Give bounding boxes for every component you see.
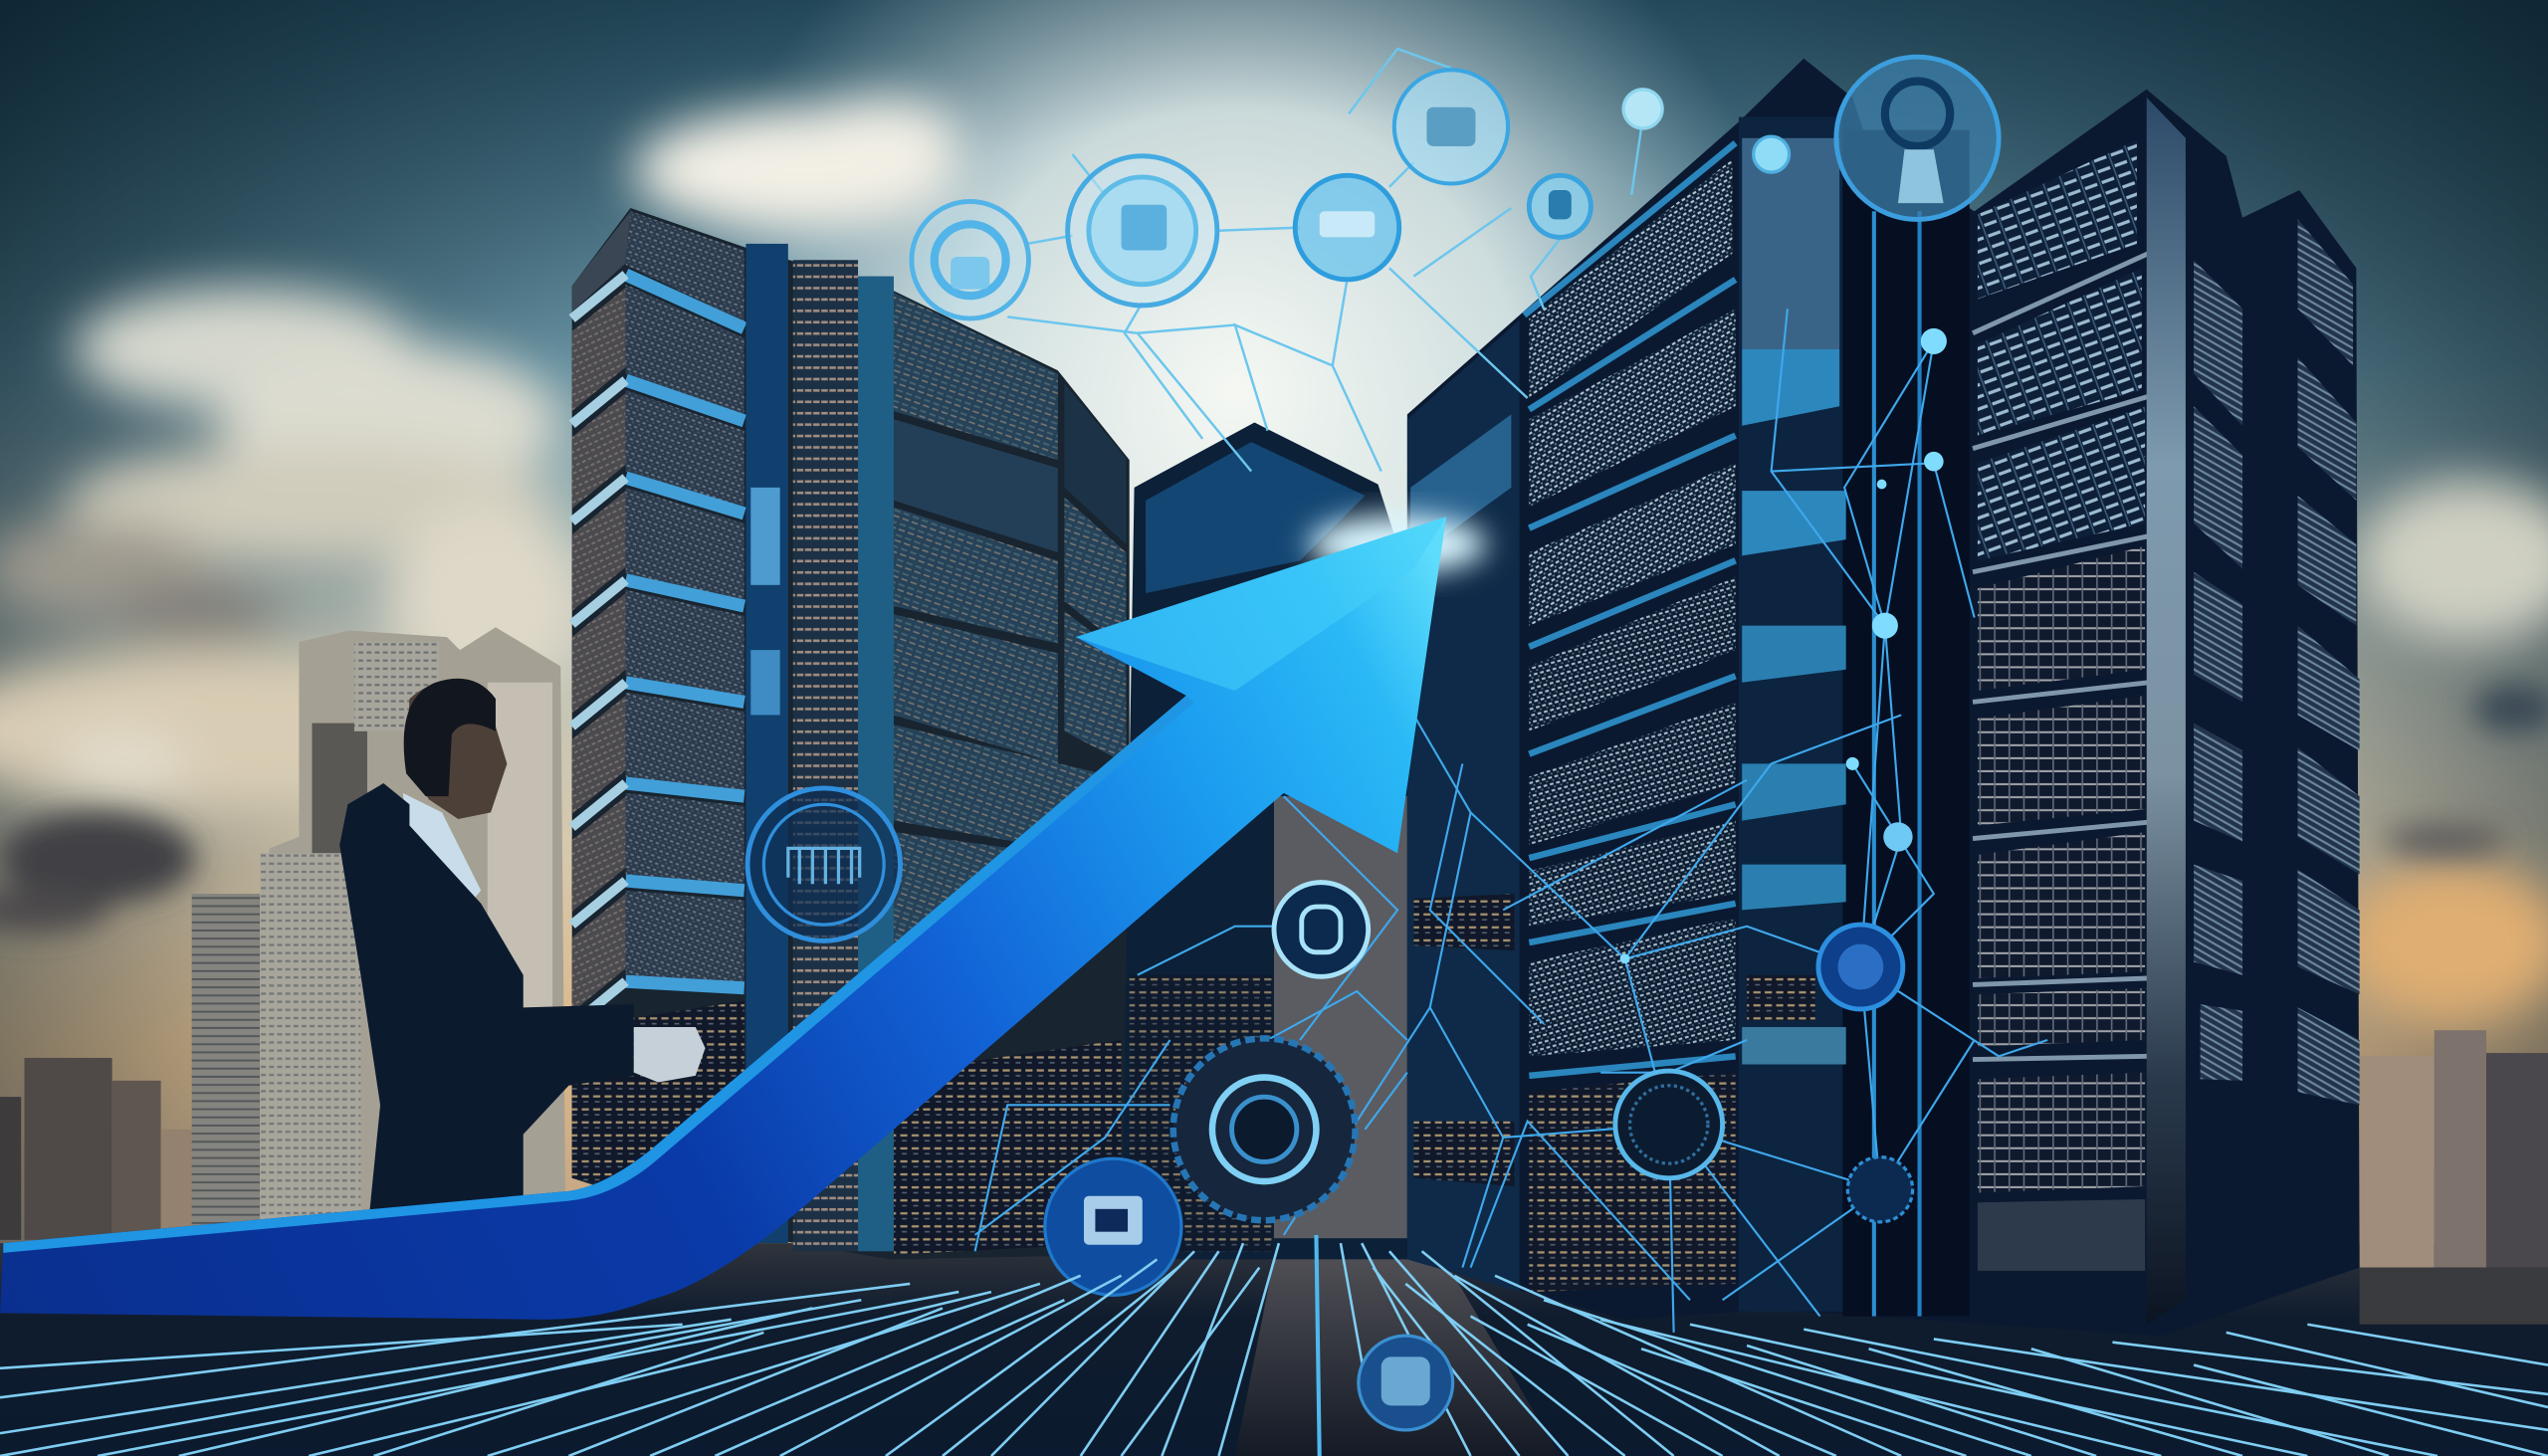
centre column [745, 244, 894, 1251]
centre columns [1739, 117, 1970, 1317]
hand [634, 1027, 706, 1082]
clouds: top centre [634, 100, 958, 232]
network web: over right tower [975, 309, 2047, 1333]
icon: top node 4 [1394, 70, 1508, 184]
left face blue ledges [1524, 143, 1736, 1076]
arrow body [0, 517, 1446, 1320]
body: jacket and hood [339, 783, 634, 1222]
icon: top node 6 [1623, 90, 1662, 128]
skyline: distant left buildings [0, 1058, 192, 1240]
icon: server node bottom [1045, 1158, 1181, 1295]
front face slabs [572, 285, 744, 1210]
icon: top node 5 [1529, 175, 1591, 237]
arrowhead highlight [1076, 517, 1446, 691]
icon: top node 3 [1295, 175, 1399, 280]
icon: top node 1 [912, 201, 1028, 318]
right face slabs [894, 293, 1130, 1255]
icon: top node 7 [1754, 136, 1790, 172]
right face server panels [1978, 139, 2145, 1271]
floor: glowing data lines [0, 1235, 2548, 1456]
outer left column [1407, 320, 1520, 1292]
icon: top node 2 [1068, 156, 1217, 306]
icon: ring node [1615, 1071, 1723, 1178]
person: businessman in suit [339, 679, 706, 1222]
far right louvre column [2298, 219, 2360, 1105]
building: mid-distance towers behind person [192, 627, 565, 1230]
arrow glow [1308, 516, 1487, 573]
icon: small ring node [1847, 1157, 1913, 1222]
icon: concentric dial [1173, 1038, 1356, 1220]
head [406, 681, 507, 819]
shirt collar [403, 793, 481, 902]
side louvre column [2194, 260, 2242, 1081]
ledge returns [572, 275, 626, 1025]
icon: circuit dial left [747, 788, 900, 940]
hair [404, 679, 496, 796]
building: right server tower [1407, 59, 2360, 1336]
skyline: distant right buildings [2360, 1030, 2548, 1325]
icon: circular node centre [1274, 883, 1369, 976]
clouds: dark storm cloud left [0, 812, 195, 933]
icon: large globe node on right tower [1836, 57, 1999, 219]
right face ledges [1973, 254, 2148, 1060]
left sub-face slabs [572, 288, 626, 1012]
arrow top bevel [3, 696, 1194, 1253]
clouds: right dark wisps [2384, 684, 2548, 856]
top cap [572, 211, 744, 321]
cyan ledges [626, 275, 744, 988]
tower body [572, 208, 1130, 1259]
building: left server tower [572, 208, 1130, 1259]
clouds: left bank [0, 288, 585, 812]
clouds: right bank [2340, 480, 2548, 1024]
icon: floor node [1359, 1336, 1453, 1430]
light corner column [2147, 98, 2186, 1325]
network nodes: right tower [1620, 328, 1947, 963]
floor: dark ground [0, 1243, 2548, 1456]
icon: node right tower [1818, 925, 1903, 1009]
arrow: rising blue growth arrow [0, 516, 1487, 1320]
network: top icon links [1007, 49, 1641, 472]
tower body [1407, 59, 2360, 1336]
building: centre background block [1122, 423, 1410, 1259]
floor: central road [1235, 1235, 1560, 1456]
left face server slabs [1529, 159, 1736, 1292]
